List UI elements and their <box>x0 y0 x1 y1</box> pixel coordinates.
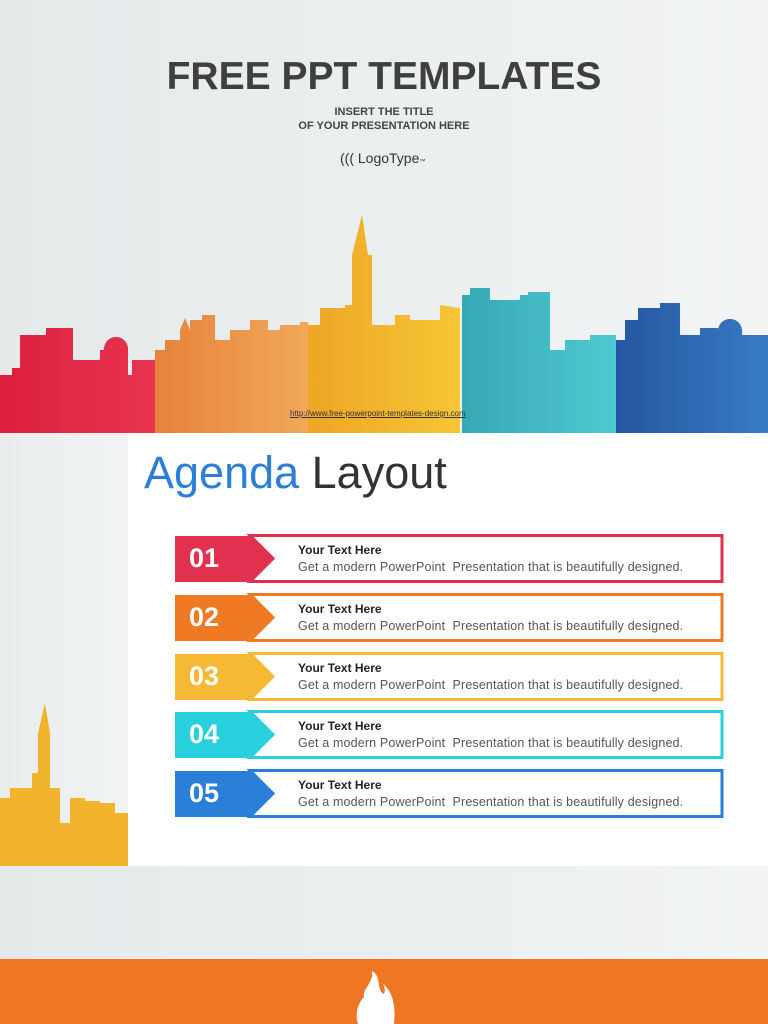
item 05 <box>175 769 724 818</box>
agenda heading: Agenda Layout <box>144 447 447 498</box>
slide 1 background <box>0 0 768 433</box>
url: http://www.free-powerpoint-templates-design.com <box>290 409 466 418</box>
item 03 <box>175 652 724 701</box>
item 05: Get a modern PowerPoint Presentation that is beautifully designed. <box>298 795 683 809</box>
item 04: Your Text Here <box>298 719 382 733</box>
item 02: 02 <box>189 602 219 632</box>
item 03: Your Text Here <box>298 661 382 675</box>
subtitle: OF YOUR PRESENTATION HERE <box>298 120 470 132</box>
item 01: Your Text Here <box>298 543 382 557</box>
yellow band <box>308 215 460 433</box>
item 03: 03 <box>189 661 219 691</box>
item 01 <box>175 534 724 583</box>
slide 2 main panel <box>128 433 768 866</box>
item 02: Get a modern PowerPoint Presentation that is beautifully designed. <box>298 619 683 633</box>
logo: ((( LogoType™ <box>340 150 425 166</box>
red band <box>0 328 155 433</box>
item 04 <box>175 710 724 759</box>
blue band <box>616 303 768 433</box>
icon: flame <box>356 971 394 1024</box>
item 02: Your Text Here <box>298 602 382 616</box>
item 04: 04 <box>189 719 219 749</box>
subtitle: INSERT THE TITLE <box>334 106 434 118</box>
orange footer band <box>0 959 768 1024</box>
item 05: Your Text Here <box>298 778 382 792</box>
title: FREE PPT TEMPLATES <box>167 55 601 98</box>
slide 2 left strip <box>0 433 128 866</box>
item 01: 01 <box>189 543 219 573</box>
skyline <box>0 215 768 433</box>
small skyline <box>0 703 128 866</box>
subtitle <box>298 106 470 132</box>
item 03: Get a modern PowerPoint Presentation that is beautifully designed. <box>298 678 683 692</box>
agenda list <box>175 534 724 818</box>
slide 3 gray area <box>0 866 768 959</box>
item 04: Get a modern PowerPoint Presentation that is beautifully designed. <box>298 736 683 750</box>
orange band <box>155 315 308 433</box>
item 05: 05 <box>189 778 219 808</box>
teal band <box>462 288 616 433</box>
item 01: Get a modern PowerPoint Presentation that is beautifully designed. <box>298 560 683 574</box>
item 02 <box>175 593 724 642</box>
